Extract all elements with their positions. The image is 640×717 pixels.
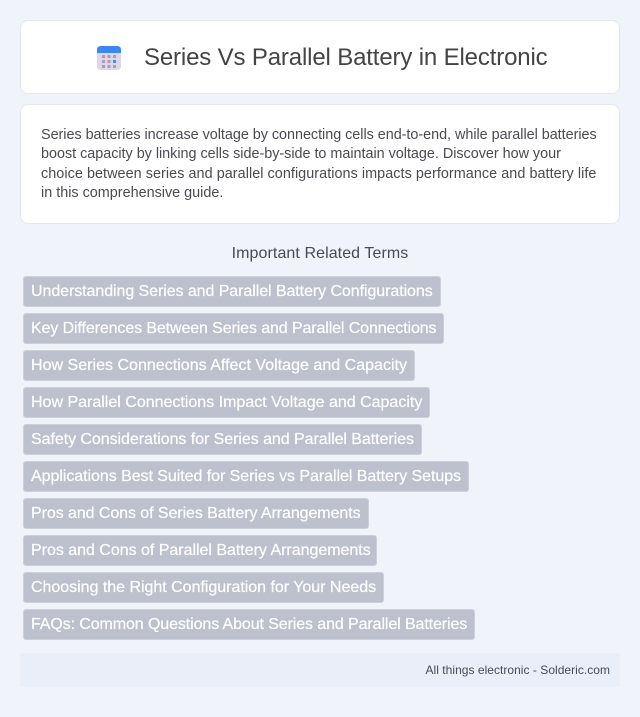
footer bar (20, 653, 620, 687)
intro paragraph: choice between series and parallel configurations impacts performance and battery life (41, 166, 596, 182)
tag 10: FAQs: Common Questions About Series and Parallel Batteries (31, 616, 467, 633)
tag 2: Key Differences Between Series and Parallel Connections (31, 320, 436, 337)
related terms list (23, 276, 475, 640)
tag 9 (23, 572, 384, 603)
tag 6 (23, 461, 469, 492)
tag 4: How Parallel Connections Impact Voltage and Capacity (31, 394, 422, 411)
tag 5 (23, 424, 422, 455)
tag 6: Applications Best Suited for Series vs Parallel Battery Setups (31, 468, 461, 485)
tag 8: Pros and Cons of Parallel Battery Arrangements (31, 542, 371, 559)
intro paragraph: in this comprehensive guide. (41, 185, 223, 201)
tag 3: How Series Connections Affect Voltage and Capacity (31, 357, 407, 374)
section heading: Important Related Terms (232, 245, 408, 262)
tag 7: Pros and Cons of Series Battery Arrangements (31, 505, 361, 522)
header card (20, 20, 620, 94)
tag 8 (23, 535, 377, 566)
intro card (20, 104, 620, 224)
tag 9: Choosing the Right Configuration for Your Needs (31, 579, 376, 596)
tag 10 (23, 609, 475, 640)
tag 1: Understanding Series and Parallel Battery Configurations (31, 283, 433, 300)
tag 1 (23, 276, 441, 307)
tag 5: Safety Considerations for Series and Parallel Batteries (31, 431, 414, 448)
tag 4 (23, 387, 430, 418)
intro paragraph: Series batteries increase voltage by connecting cells end-to-end, while parallel batteries (41, 127, 597, 143)
title: Series Vs Parallel Battery in Electronic (144, 44, 548, 71)
intro paragraph (41, 127, 597, 201)
tag 3 (23, 350, 415, 381)
icon: calendar (97, 46, 121, 70)
footer text: All things electronic - Solderic.com (426, 663, 610, 677)
intro paragraph: boost capacity by linking cells side-by-side to maintain voltage. Discover how your (41, 146, 561, 162)
tag 2 (23, 313, 444, 344)
tag 7 (23, 498, 369, 529)
